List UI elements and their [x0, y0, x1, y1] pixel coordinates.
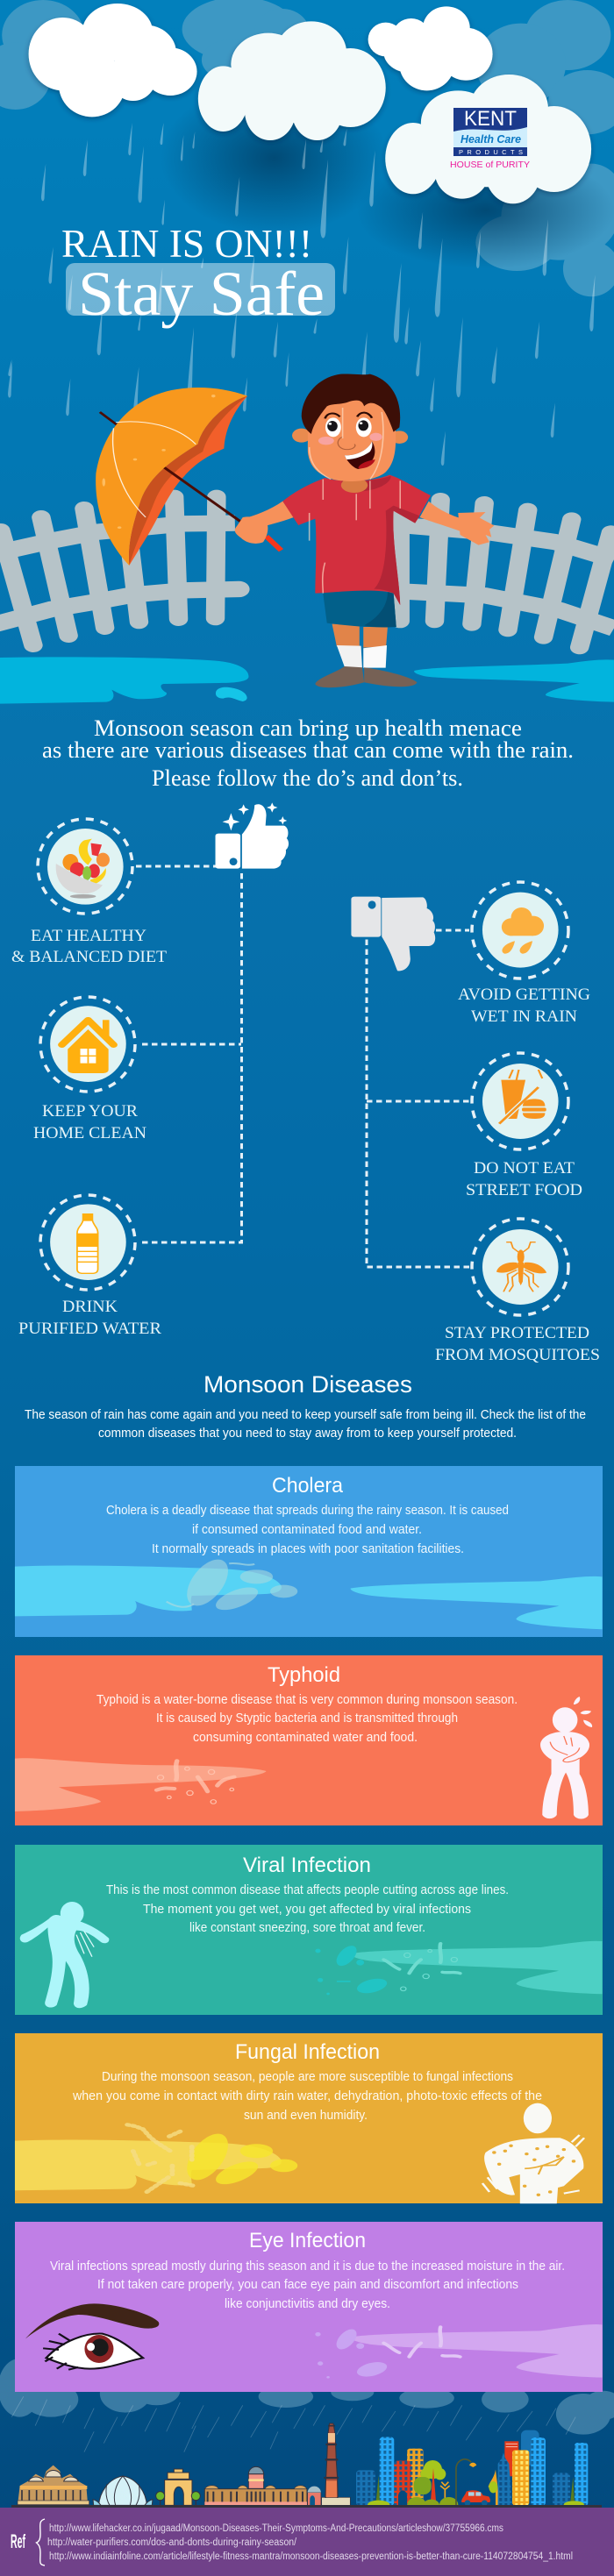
hero illustration: fence, puddles, umbrella and boy	[0, 374, 614, 704]
label: DO NOT EAT	[474, 1159, 575, 1178]
icon: fruit bowl	[47, 829, 124, 905]
car	[461, 2490, 490, 2506]
boy	[235, 374, 494, 687]
description: sun and even humidity.	[244, 2108, 368, 2123]
stay safe highlight box	[66, 263, 335, 316]
icon ring	[40, 997, 135, 1092]
icon: thumbs down	[351, 897, 435, 971]
water and germ art	[15, 1758, 267, 1811]
icon ring	[472, 882, 568, 978]
cloud 2	[198, 21, 386, 140]
KENT logo: HOUSE of PURITY	[450, 160, 530, 170]
storm clouds	[0, 2359, 614, 2435]
panel: fungal infection	[15, 2033, 603, 2203]
item: eat healthy	[11, 819, 167, 966]
connectors: don'ts	[367, 930, 469, 1267]
icon: mosquito	[482, 1229, 559, 1305]
title: stay safe: Stay Safe	[78, 259, 325, 329]
intro text: Monsoon season can bring up health menace	[94, 715, 522, 741]
label: WET IN RAIN	[471, 1007, 577, 1026]
buildings right group	[489, 2430, 588, 2508]
KENT logo	[450, 107, 530, 170]
title: rain is on: RAIN IS ON!!!	[61, 222, 312, 266]
footer storm clouds and rain	[0, 2359, 614, 2452]
icon: person sneezing	[20, 1902, 109, 2008]
panel background	[15, 1845, 603, 2015]
title: Fungal Infection	[235, 2040, 380, 2064]
water and bacteria art	[15, 1555, 603, 1629]
description: It normally spreads in places with poor sanitation facilities.	[152, 1541, 464, 1556]
label: FROM MOSQUITOES	[435, 1346, 600, 1364]
water and germ art	[315, 1941, 603, 1996]
intro text: Please follow the do’s and don’ts.	[152, 765, 463, 791]
item: drink purified water	[18, 1195, 161, 1338]
icon: person with stomach pain	[540, 1697, 592, 1819]
icon: bottle	[50, 1204, 126, 1280]
icon ring	[472, 1219, 568, 1315]
description	[106, 1882, 509, 1935]
item: stay protected from mosquitoes	[435, 1219, 600, 1364]
panel background	[15, 1466, 603, 1637]
description	[72, 2069, 542, 2123]
title: Eye Infection	[249, 2229, 366, 2252]
label: PURIFIED WATER	[18, 1320, 161, 1338]
section heading: Monsoon Diseases	[203, 1371, 412, 1398]
section intro	[25, 1407, 586, 1441]
label	[33, 1102, 146, 1142]
cloud 3	[368, 6, 493, 90]
description	[50, 2259, 565, 2311]
ground rail	[11, 2505, 602, 2508]
label: KEEP YOUR	[42, 1102, 138, 1121]
title: Cholera	[272, 1474, 344, 1498]
rain lines	[11, 2396, 575, 2452]
KENT logo: Health Care	[460, 132, 521, 146]
label: HOME CLEAN	[33, 1124, 146, 1142]
panel background	[15, 2033, 603, 2203]
india gate	[156, 2469, 200, 2506]
item: keep home clean	[33, 997, 146, 1142]
rain drops	[8, 123, 596, 466]
water and fungus art	[15, 2124, 297, 2192]
references list: http://water-purifiers.com/dos-and-donts-during-rainy-season/	[47, 2537, 297, 2548]
KENT logo: PRODUCTS	[459, 148, 523, 156]
panel background	[15, 1655, 603, 1825]
icon ring	[40, 1195, 135, 1290]
infographic canvas: Ref	[11, 2530, 25, 2552]
umbrella	[96, 388, 282, 566]
label	[466, 1159, 582, 1199]
item: avoid getting wet	[458, 882, 590, 1026]
panel: cholera	[15, 1466, 603, 1637]
label: DRINK	[62, 1298, 118, 1316]
footer band	[0, 2508, 614, 2576]
description: Viral infections spread mostly during this season and it is due to the increased moisture in the air.	[50, 2259, 565, 2274]
panel: eye infection	[15, 2222, 603, 2392]
label	[458, 986, 590, 1026]
icon: thumbs up	[216, 802, 289, 869]
parliament building	[204, 2466, 321, 2505]
title: Viral Infection	[243, 1854, 371, 1877]
label: & BALANCED DIET	[11, 948, 167, 966]
description: consuming contaminated water and food.	[193, 1730, 418, 1745]
cloud 1	[29, 4, 197, 117]
section intro: common diseases that you need to stay away from to keep yourself protected.	[98, 1426, 517, 1441]
qutub minar	[322, 2423, 350, 2506]
icon: food crossed out	[482, 1064, 559, 1139]
references brace	[37, 2519, 45, 2565]
lotus temple	[93, 2476, 153, 2505]
left fence	[0, 497, 239, 645]
item: no street food	[466, 1053, 582, 1199]
intro text: as there are various diseases that can come with the rain.	[42, 737, 574, 763]
connectors: do's	[136, 866, 242, 1242]
cloud shadows	[161, 82, 614, 269]
skyline: modern city	[356, 2430, 588, 2512]
background clouds	[0, 0, 614, 296]
cloud 4	[385, 75, 591, 203]
description: if consumed contaminated food and water.	[192, 1522, 422, 1537]
references list: http://www.lifehacker.co.in/jugaad/Monsoon-Diseases-Their-Symptoms-And-Precautions/articleshow/37755966.cms	[49, 2523, 503, 2534]
description: when you come in contact with dirty rain water, dehydration, photo-toxic effects of the	[72, 2089, 542, 2103]
icon ring	[472, 1053, 568, 1149]
icon: rain cloud	[482, 893, 559, 968]
label: STREET FOOD	[466, 1181, 582, 1199]
label	[11, 927, 167, 966]
description: During the monsoon season, people are more susceptible to fungal infections	[102, 2069, 513, 2084]
title: Typhoid	[268, 1663, 340, 1687]
KENT logo: KENT	[464, 107, 517, 131]
description: This is the most common disease that affects people cutting across age lines.	[106, 1882, 509, 1897]
buildings left group	[356, 2437, 458, 2512]
description: The moment you get wet, you get affected by viral infections	[143, 1902, 471, 1917]
description: Typhoid is a water-borne disease that is very common during monsoon season.	[96, 1692, 518, 1707]
description	[96, 1692, 518, 1745]
description: It is caused by Styptic bacteria and is transmitted through	[156, 1711, 458, 1726]
description	[106, 1503, 509, 1556]
description: like constant sneezing, sore throat and fever.	[189, 1920, 425, 1935]
panel: viral infection	[15, 1845, 603, 2015]
icon ring	[38, 819, 132, 914]
puddles	[0, 657, 614, 704]
water and germ art	[315, 2324, 603, 2380]
references list	[47, 2523, 573, 2562]
label	[18, 1298, 161, 1338]
label: EAT HEALTHY	[31, 927, 146, 945]
label	[435, 1324, 600, 1364]
icon: person with rash	[482, 2103, 584, 2203]
street lamp	[456, 2459, 476, 2506]
akshardham temple	[18, 2466, 89, 2505]
intro text	[42, 715, 574, 791]
right fence	[394, 500, 614, 647]
description: If not taken care properly, you can face eye pain and discomfort and infections	[97, 2277, 518, 2292]
icon: house	[50, 1006, 126, 1082]
panel: typhoid	[15, 1655, 603, 1825]
panel background	[15, 2222, 603, 2392]
label: STAY PROTECTED	[445, 1324, 589, 1342]
hero: sky, clouds and rain	[0, 0, 614, 466]
skyline: indian monuments	[18, 2423, 350, 2506]
description: like conjunctivitis and dry eyes.	[225, 2296, 390, 2311]
icon: eye	[25, 2303, 159, 2370]
label: AVOID GETTING	[458, 986, 590, 1004]
description: Cholera is a deadly disease that spreads during the rainy season. It is caused	[106, 1503, 509, 1518]
